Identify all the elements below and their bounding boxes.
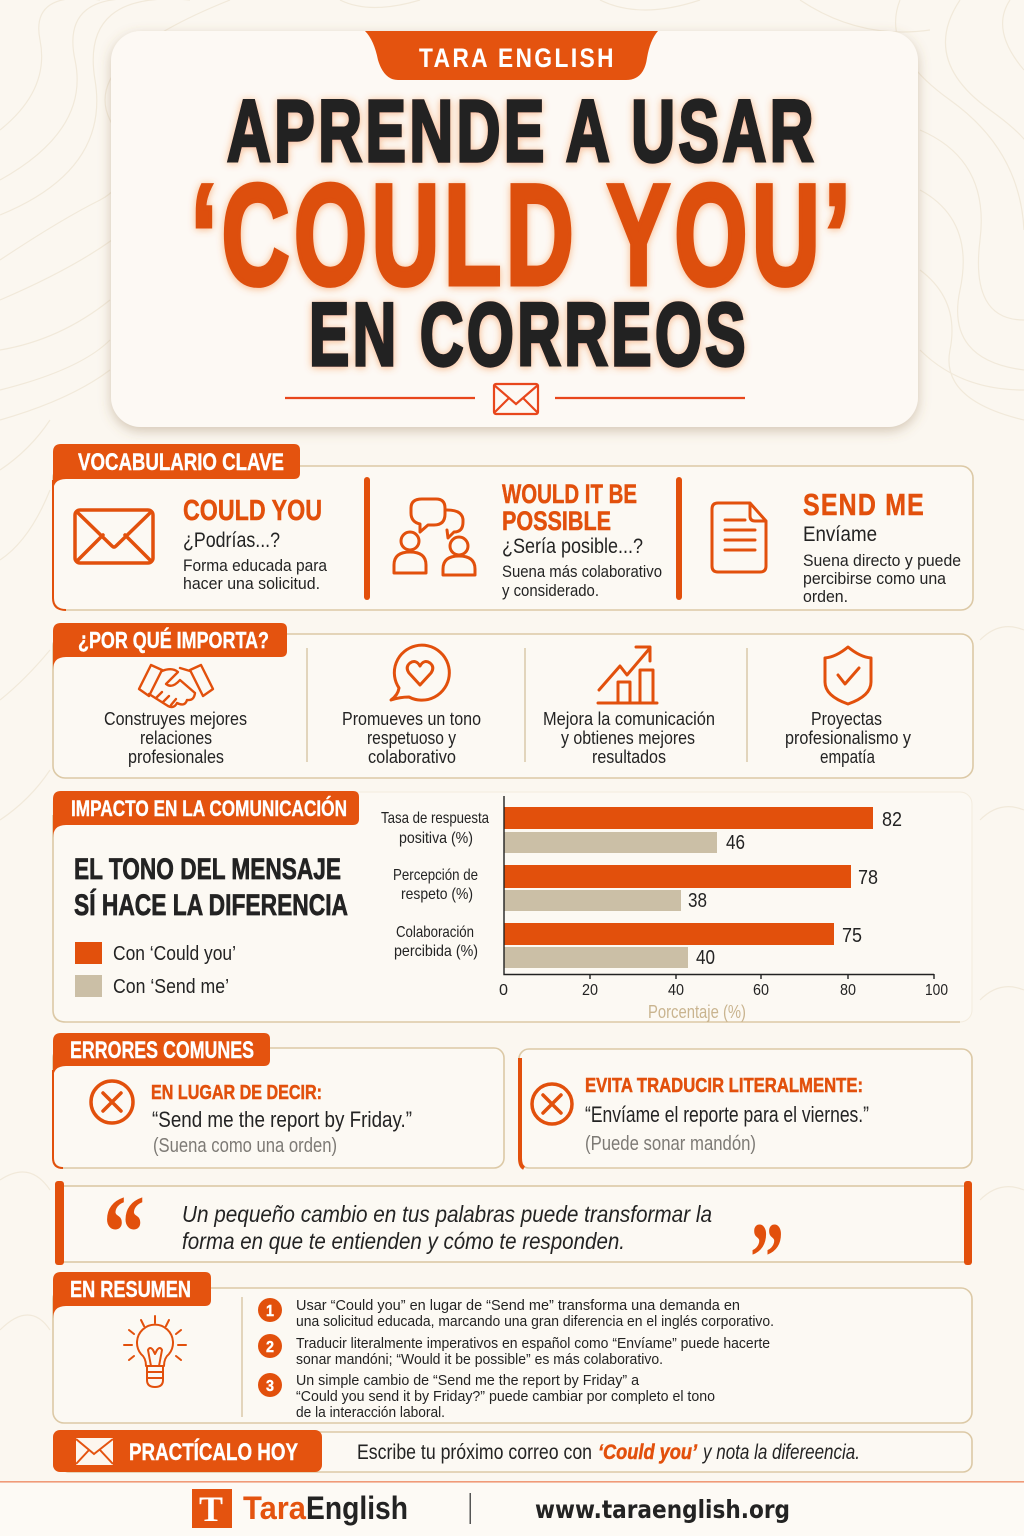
icon: speech bubble heart	[391, 645, 449, 700]
tab heading: EN RESUMEN	[70, 1276, 191, 1302]
call to action label: PRACTÍCALO HOY	[129, 1438, 298, 1466]
vocab: send me: percibirse como una	[803, 569, 947, 588]
tab heading: IMPACTO EN LA COMUNICACIÓN	[71, 796, 347, 821]
bar values: 82	[882, 809, 902, 831]
row labels: respeto (%)	[401, 886, 473, 903]
reason: tono: colaborativo	[368, 747, 456, 767]
callout: quote	[55, 1174, 972, 1313]
call to action text: ‘Could you’	[598, 1441, 698, 1464]
panel: practícalo hoy	[53, 1430, 972, 1472]
axis ticks: 100	[925, 982, 948, 999]
error text: (Puede sonar mandón)	[585, 1133, 756, 1155]
legend	[75, 942, 236, 998]
reason: tono: Promueves un tono	[342, 709, 481, 729]
panel: por qué importa	[53, 623, 973, 778]
axis ticks: 80	[840, 982, 856, 999]
call to action text	[357, 1441, 860, 1464]
reason: relaciones	[104, 709, 247, 767]
point 2	[258, 1334, 770, 1368]
tab heading: ERRORES COMUNES	[70, 1037, 254, 1064]
quote close: ”	[750, 1202, 784, 1313]
reason: relaciones: relaciones	[140, 728, 212, 748]
bars	[504, 807, 873, 968]
tab heading	[53, 444, 300, 492]
row labels: Tasa de respuesta	[381, 810, 489, 827]
tab heading	[53, 791, 359, 838]
reason: comunicación: resultados	[592, 747, 666, 767]
vocab: would it be possible: Suena más colaborativo	[502, 562, 662, 581]
axis ticks: 60	[753, 982, 769, 999]
title	[191, 83, 855, 384]
subheading	[74, 853, 348, 922]
vocab: send me: orden.	[803, 587, 848, 606]
point 3: “Could you send it by Friday?” puede cambiar por completo el tono	[296, 1388, 715, 1405]
error text: “Send me the report by Friday.”	[152, 1107, 412, 1132]
vocab: could you	[183, 495, 327, 593]
point 1	[258, 1297, 774, 1330]
tab heading	[53, 623, 287, 670]
quote text: forma en que te entienden y cómo te responden.	[182, 1228, 625, 1254]
error text: (Suena como una orden)	[153, 1135, 337, 1157]
footer	[0, 1481, 1024, 1529]
point 1: Usar “Could you” en lugar de “Send me” transforma una demanda en	[296, 1297, 740, 1314]
brand tab: TARA ENGLISH	[419, 43, 616, 73]
tab heading: VOCABULARIO CLAVE	[78, 449, 284, 476]
icon: envelope divider	[285, 384, 745, 414]
vocab: would it be possible	[502, 479, 662, 600]
icon: error x	[91, 1081, 133, 1123]
point 2: Traducir literalmente imperativos en español como “Envíame” puede hacerte	[296, 1335, 770, 1352]
panel: en resumen	[53, 1272, 972, 1423]
point 3: 3	[266, 1378, 274, 1395]
title: EN CORREOS	[309, 284, 749, 384]
vocab: would it be possible: WOULD IT BE	[502, 479, 637, 509]
vocab: send me: Suena directo y puede	[803, 551, 961, 570]
reason: tono: respetuoso y	[367, 728, 456, 748]
quote open: “	[103, 1174, 145, 1291]
vocab: send me: Envíame	[803, 523, 877, 546]
panel: impacto en la comunicación	[53, 791, 972, 1022]
logo: English	[306, 1490, 408, 1526]
error text: EVITA TRADUCIR LITERALMENTE:	[585, 1075, 863, 1097]
vocab: would it be possible: POSSIBLE	[502, 506, 611, 536]
panel: vocabulario clave	[53, 444, 973, 610]
icon: white envelope	[76, 1438, 113, 1465]
bar values: 46	[726, 832, 745, 854]
reason: comunicación: Mejora la comunicación	[543, 709, 715, 729]
point 1: 1	[266, 1303, 274, 1320]
point 2: 2	[266, 1339, 274, 1356]
icon: document	[712, 503, 766, 572]
quote text: Un pequeño cambio en tus palabras puede transformar la	[182, 1201, 712, 1227]
axis ticks: 40	[668, 982, 684, 999]
reason: tono	[342, 709, 481, 767]
bar values: 38	[688, 890, 707, 912]
call to action text: Escribe tu próximo correo con	[357, 1441, 592, 1464]
website: www.taraenglish.org	[535, 1495, 790, 1524]
axis ticks	[499, 982, 948, 999]
vocab: send me	[803, 487, 961, 606]
icon: handshake	[139, 665, 213, 707]
vocab: send me: SEND ME	[803, 487, 925, 522]
bar chart	[381, 796, 948, 1022]
error text	[151, 1082, 412, 1157]
icon: shield	[825, 647, 871, 704]
bar values: 40	[696, 947, 715, 969]
icon: envelope	[75, 510, 153, 563]
reason: comunicación	[543, 709, 715, 767]
vocab: could you: hacer una solicitud.	[183, 574, 320, 593]
reason: relaciones: profesionales	[128, 747, 224, 767]
logo: Tara	[243, 1490, 306, 1526]
vocab: could you: ¿Podrías...?	[183, 529, 280, 552]
point 2: sonar mandóni; “Would it be possible” es más colaborativo.	[296, 1351, 663, 1368]
point 3	[258, 1372, 715, 1421]
subheading: SÍ HACE LA DIFERENCIA	[74, 888, 348, 922]
icon: people talking	[394, 499, 475, 575]
axis ticks: 20	[582, 982, 598, 999]
reason: comunicación: y obtienes mejores	[561, 728, 695, 748]
call to action text: y nota la difereencia.	[701, 1441, 860, 1464]
row labels: Colaboración	[396, 924, 474, 941]
error text: EN LUGAR DE DECIR:	[151, 1082, 322, 1104]
row labels: percibida (%)	[394, 943, 478, 960]
subheading: EL TONO DEL MENSAJE	[74, 853, 341, 886]
tab heading: ¿POR QUÉ IMPORTA?	[78, 626, 269, 653]
panel: errores comunes 2	[519, 1049, 972, 1168]
icon: growth chart	[598, 647, 657, 703]
point 1: una solicitud educada, marcando una gran diferencia en el inglés corporativo.	[296, 1313, 774, 1330]
footer background	[0, 1482, 1024, 1536]
row labels	[381, 810, 489, 960]
bar values	[688, 809, 902, 969]
error text	[585, 1075, 869, 1155]
panel: errores comunes 1	[53, 1033, 504, 1168]
tab heading	[53, 1272, 211, 1319]
vocab: would it be possible: ¿Sería posible...?	[502, 535, 643, 558]
legend: Con ‘Send me’	[113, 976, 229, 998]
bar values: 75	[842, 925, 862, 947]
logo	[192, 1489, 408, 1529]
icon: error x	[532, 1084, 572, 1124]
reason: profesionalismo: profesionalismo y	[785, 728, 911, 748]
reason: profesionalismo: empatía	[820, 747, 876, 767]
legend: Con ‘Could you’	[113, 943, 236, 965]
axis ticks: 0	[499, 982, 508, 999]
reason: profesionalismo	[785, 709, 911, 767]
vocab: could you: COULD YOU	[183, 495, 322, 527]
logo: T	[199, 1489, 223, 1529]
axis title: Porcentaje (%)	[648, 1002, 746, 1022]
vocab: would it be possible: y considerado.	[502, 581, 599, 600]
error text: “Envíame el reporte para el viernes.”	[585, 1102, 869, 1127]
tab heading	[53, 1033, 270, 1079]
point 3: de la interacción laboral.	[296, 1404, 445, 1421]
row labels: Percepción de	[393, 867, 478, 884]
vocab: could you: Forma educada para	[183, 556, 327, 575]
point 3: Un simple cambio de “Send me the report by Friday” a	[296, 1372, 640, 1389]
icon: light bulb	[124, 1316, 186, 1387]
reason: relaciones: Construyes mejores	[104, 709, 247, 729]
bar values: 78	[858, 867, 878, 889]
brand tab	[365, 31, 658, 80]
row labels: positiva (%)	[399, 830, 473, 847]
quote text	[182, 1201, 712, 1254]
reason: profesionalismo: Proyectas	[811, 709, 882, 729]
header card	[111, 31, 918, 427]
